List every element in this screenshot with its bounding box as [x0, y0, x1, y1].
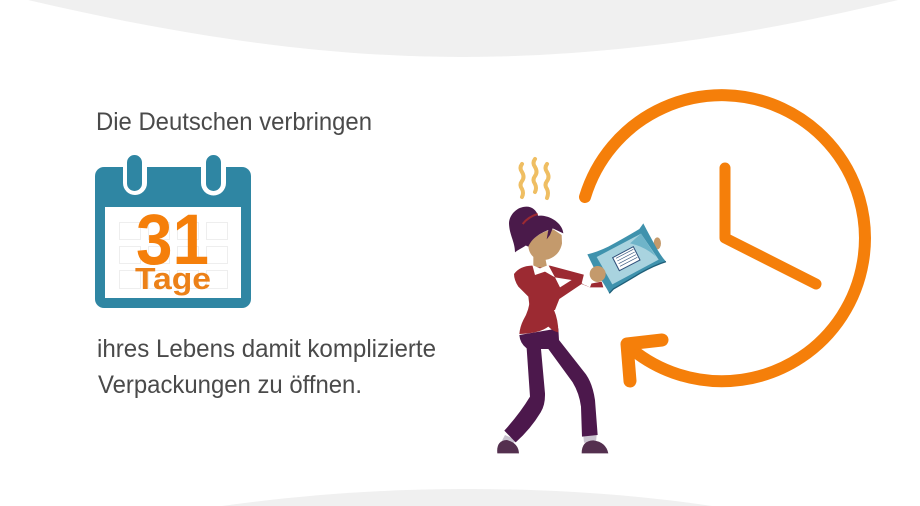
face: [528, 229, 562, 260]
figure: woman with package: [497, 207, 666, 453]
intro text: Die Deutschen verbringen: [96, 108, 372, 136]
body text: ihres Lebens damit komplizierte: [97, 335, 436, 363]
hair: [520, 216, 563, 247]
sweater waist: [519, 298, 558, 334]
ponytail: [509, 207, 538, 252]
top grey arc: [28, 0, 898, 57]
bottom grey arc: [222, 489, 712, 506]
icon: steam lines: [520, 159, 548, 198]
neck: [533, 253, 547, 268]
number 31: 31: [136, 201, 209, 280]
calendar grid cells: [120, 222, 228, 288]
hair tie: [523, 214, 538, 224]
icon: calendar 31 Tage: [95, 155, 251, 308]
cuff: [582, 274, 593, 287]
calendar page: [105, 207, 241, 298]
legs and shoes: [497, 298, 608, 453]
shoes: [497, 440, 519, 453]
calendar body: [95, 167, 251, 308]
icon: clock with arrow: [585, 95, 865, 381]
clock hands: [725, 168, 816, 284]
socks: [502, 435, 517, 445]
arm gap: [555, 277, 572, 287]
package and rear hand: [587, 223, 666, 293]
upper body: [509, 207, 606, 310]
clock arc: [585, 95, 865, 381]
front hand: [590, 266, 606, 282]
arrowhead: [627, 340, 662, 381]
label Tage: Tage: [135, 261, 211, 296]
torso: [514, 266, 603, 310]
package label: [613, 247, 640, 271]
body text: [97, 335, 436, 399]
calendar rings: [123, 155, 226, 196]
package wrapper: [587, 223, 666, 293]
body text: Verpackungen zu öffnen.: [98, 371, 362, 399]
rear hand: [654, 237, 661, 249]
trousers: [504, 328, 598, 442]
collar: [532, 265, 555, 277]
